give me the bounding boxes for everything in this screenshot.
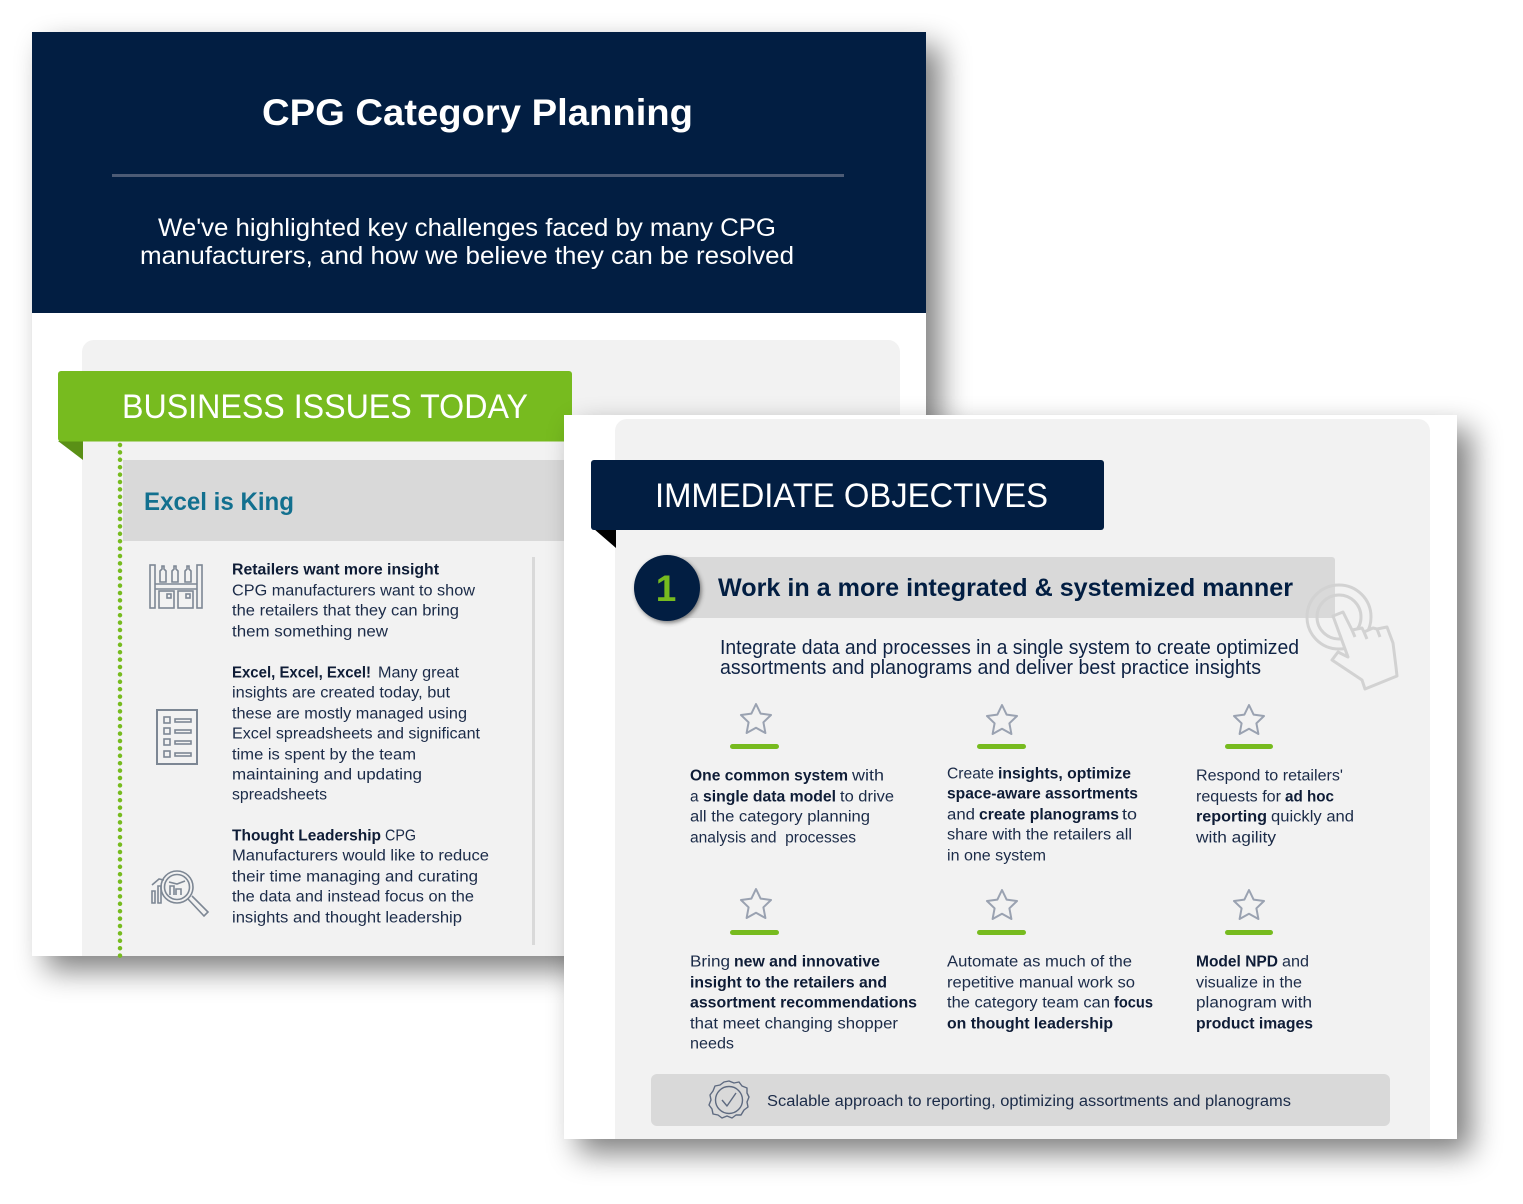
objective: insights and planograms [947,705,1138,865]
objective: automate manual work [947,890,1153,1033]
panel: immediate objectives page [564,415,1471,1153]
intro text: Integrate data and processes in a single system to create optimized [720,637,1299,659]
icon: quality badge [709,1081,749,1118]
objective: one common system: a [690,789,699,806]
objective: model NPD: and [1282,954,1309,971]
section banner [58,371,572,442]
objective: model NPD: product images [1196,1016,1313,1033]
objective: insights and planograms: space-aware assortments [947,786,1138,803]
subtitle: We've highlighted key challenges faced by many CPG [158,214,776,242]
title: CPG Category Planning [262,92,693,133]
text block: thought leadership: their time managing and curating [232,869,478,886]
text block: thought leadership: Manufacturers would like to reduce [232,848,489,865]
ribbon fold [594,529,616,548]
text block: excel excel excel: time is spent by the team [232,747,416,764]
number badge: 1 [656,568,676,609]
objective: insights and planograms: insights, optimize [998,766,1131,783]
callout bar: Scalable approach to reporting, optimizing assortments and planograms [767,1093,1291,1110]
objective: ad hoc reporting: quickly and [1271,809,1354,826]
icon: pointing hand [1307,585,1397,689]
objective: new and innovative insight: needs [690,1036,734,1053]
objective: automate manual work: focus [1114,995,1153,1012]
section banner [591,460,1104,530]
objective: one common system: One common system [690,768,848,785]
objective: ad hoc reporting: requests for [1196,789,1281,806]
intro text [720,637,1299,679]
objective: insights and planograms: to [1122,807,1137,824]
objective: new and innovative insight: assortment recommendations [690,995,917,1012]
heading band: Work in a more integrated & systemized manner [718,574,1293,602]
objective: one common system: single data model [703,789,836,806]
intro text: assortments and planograms and deliver best practice insights [720,657,1261,679]
objective: new and innovative insight: insight to the retailers and [690,975,887,992]
icon: store shelf [150,565,202,608]
text block: thought leadership: CPG [385,828,416,845]
objective: one common system: analysis and processes [690,830,856,847]
icon: magnifier analytics [152,871,208,916]
header banner [32,32,926,313]
section banner: BUSINESS ISSUES TODAY [122,388,528,426]
objective: one common system: to drive [840,789,894,806]
text block: excel excel excel: Excel, Excel, Excel! [232,665,371,682]
icon: checklist [157,710,197,764]
text block: retailers want more insight: CPG manufacturers want to show [232,583,476,600]
text block: retailers want more insight: them something new [232,624,389,641]
objective: insights and planograms: in one system [947,848,1046,865]
text block: retailers want more insight: Retailers want more insight [232,562,439,579]
objective: insights and planograms: and [947,807,975,824]
text block: excel excel excel: these are mostly managed using [232,706,467,723]
ribbon fold [58,441,83,460]
heading band [680,557,1335,618]
objective: automate manual work: the category team can [947,995,1110,1012]
objective: insights and planograms: Create [947,766,994,783]
text block: thought leadership [232,828,489,927]
objective: ad hoc reporting: Respond to retailers' [1196,768,1343,785]
text block: excel excel excel: insights are created today, but [232,685,451,702]
text block: thought leadership: the data and instead focus on the [232,889,474,906]
objective: insights and planograms: create planograms [979,807,1119,824]
subtitle: manufacturers, and how we believe they can be resolved [140,242,794,270]
objective: one common system [690,704,894,847]
subheading band [123,460,568,541]
text block: excel excel excel: Many great [378,665,460,682]
objective: model NPD: planogram with [1196,995,1312,1012]
panel: category planning page [32,32,940,970]
section banner: IMMEDIATE OBJECTIVES [655,477,1048,515]
text block: excel excel excel: spreadsheets [232,787,327,804]
objective: new and innovative insight [690,889,917,1053]
objective: automate manual work: Automate as much of the [947,954,1132,971]
text block: thought leadership: insights and thought leadership [232,910,462,927]
objective: automate manual work: repetitive manual work so [947,975,1135,992]
text block: excel excel excel [232,665,481,804]
number badge [634,555,702,623]
text block: thought leadership: Thought Leadership [232,828,381,845]
objective: ad hoc reporting [1195,705,1354,847]
objective: one common system: all the category planning [690,809,870,826]
objective: model NPD: Model NPD [1196,954,1278,971]
objective: one common system: with [851,768,884,785]
objective: ad hoc reporting: reporting [1196,809,1267,826]
objective: ad hoc reporting: with agility [1195,830,1276,847]
objective: new and innovative insight: Bring [690,954,730,971]
objective: new and innovative insight: new and innovative [734,954,880,971]
subtitle [140,214,794,270]
text block: retailers want more insight: the retailers that they can bring [232,603,459,620]
text block: excel excel excel: maintaining and updating [232,767,422,784]
objective: insights and planograms: share with the retailers all [947,827,1132,844]
subheading band: Excel is King [144,488,294,516]
objective: ad hoc reporting: ad hoc [1285,789,1334,806]
objective: model NPD [1196,890,1313,1033]
objective: model NPD: visualize in the [1196,975,1302,992]
text block: excel excel excel: Excel spreadsheets and significant [232,726,481,743]
objective: automate manual work: on thought leadership [947,1016,1113,1033]
objective: new and innovative insight: that meet changing shopper [690,1016,898,1033]
panel: business issues [58,340,900,956]
callout bar [651,1074,1390,1126]
text block: retailers want more insight [232,562,476,641]
